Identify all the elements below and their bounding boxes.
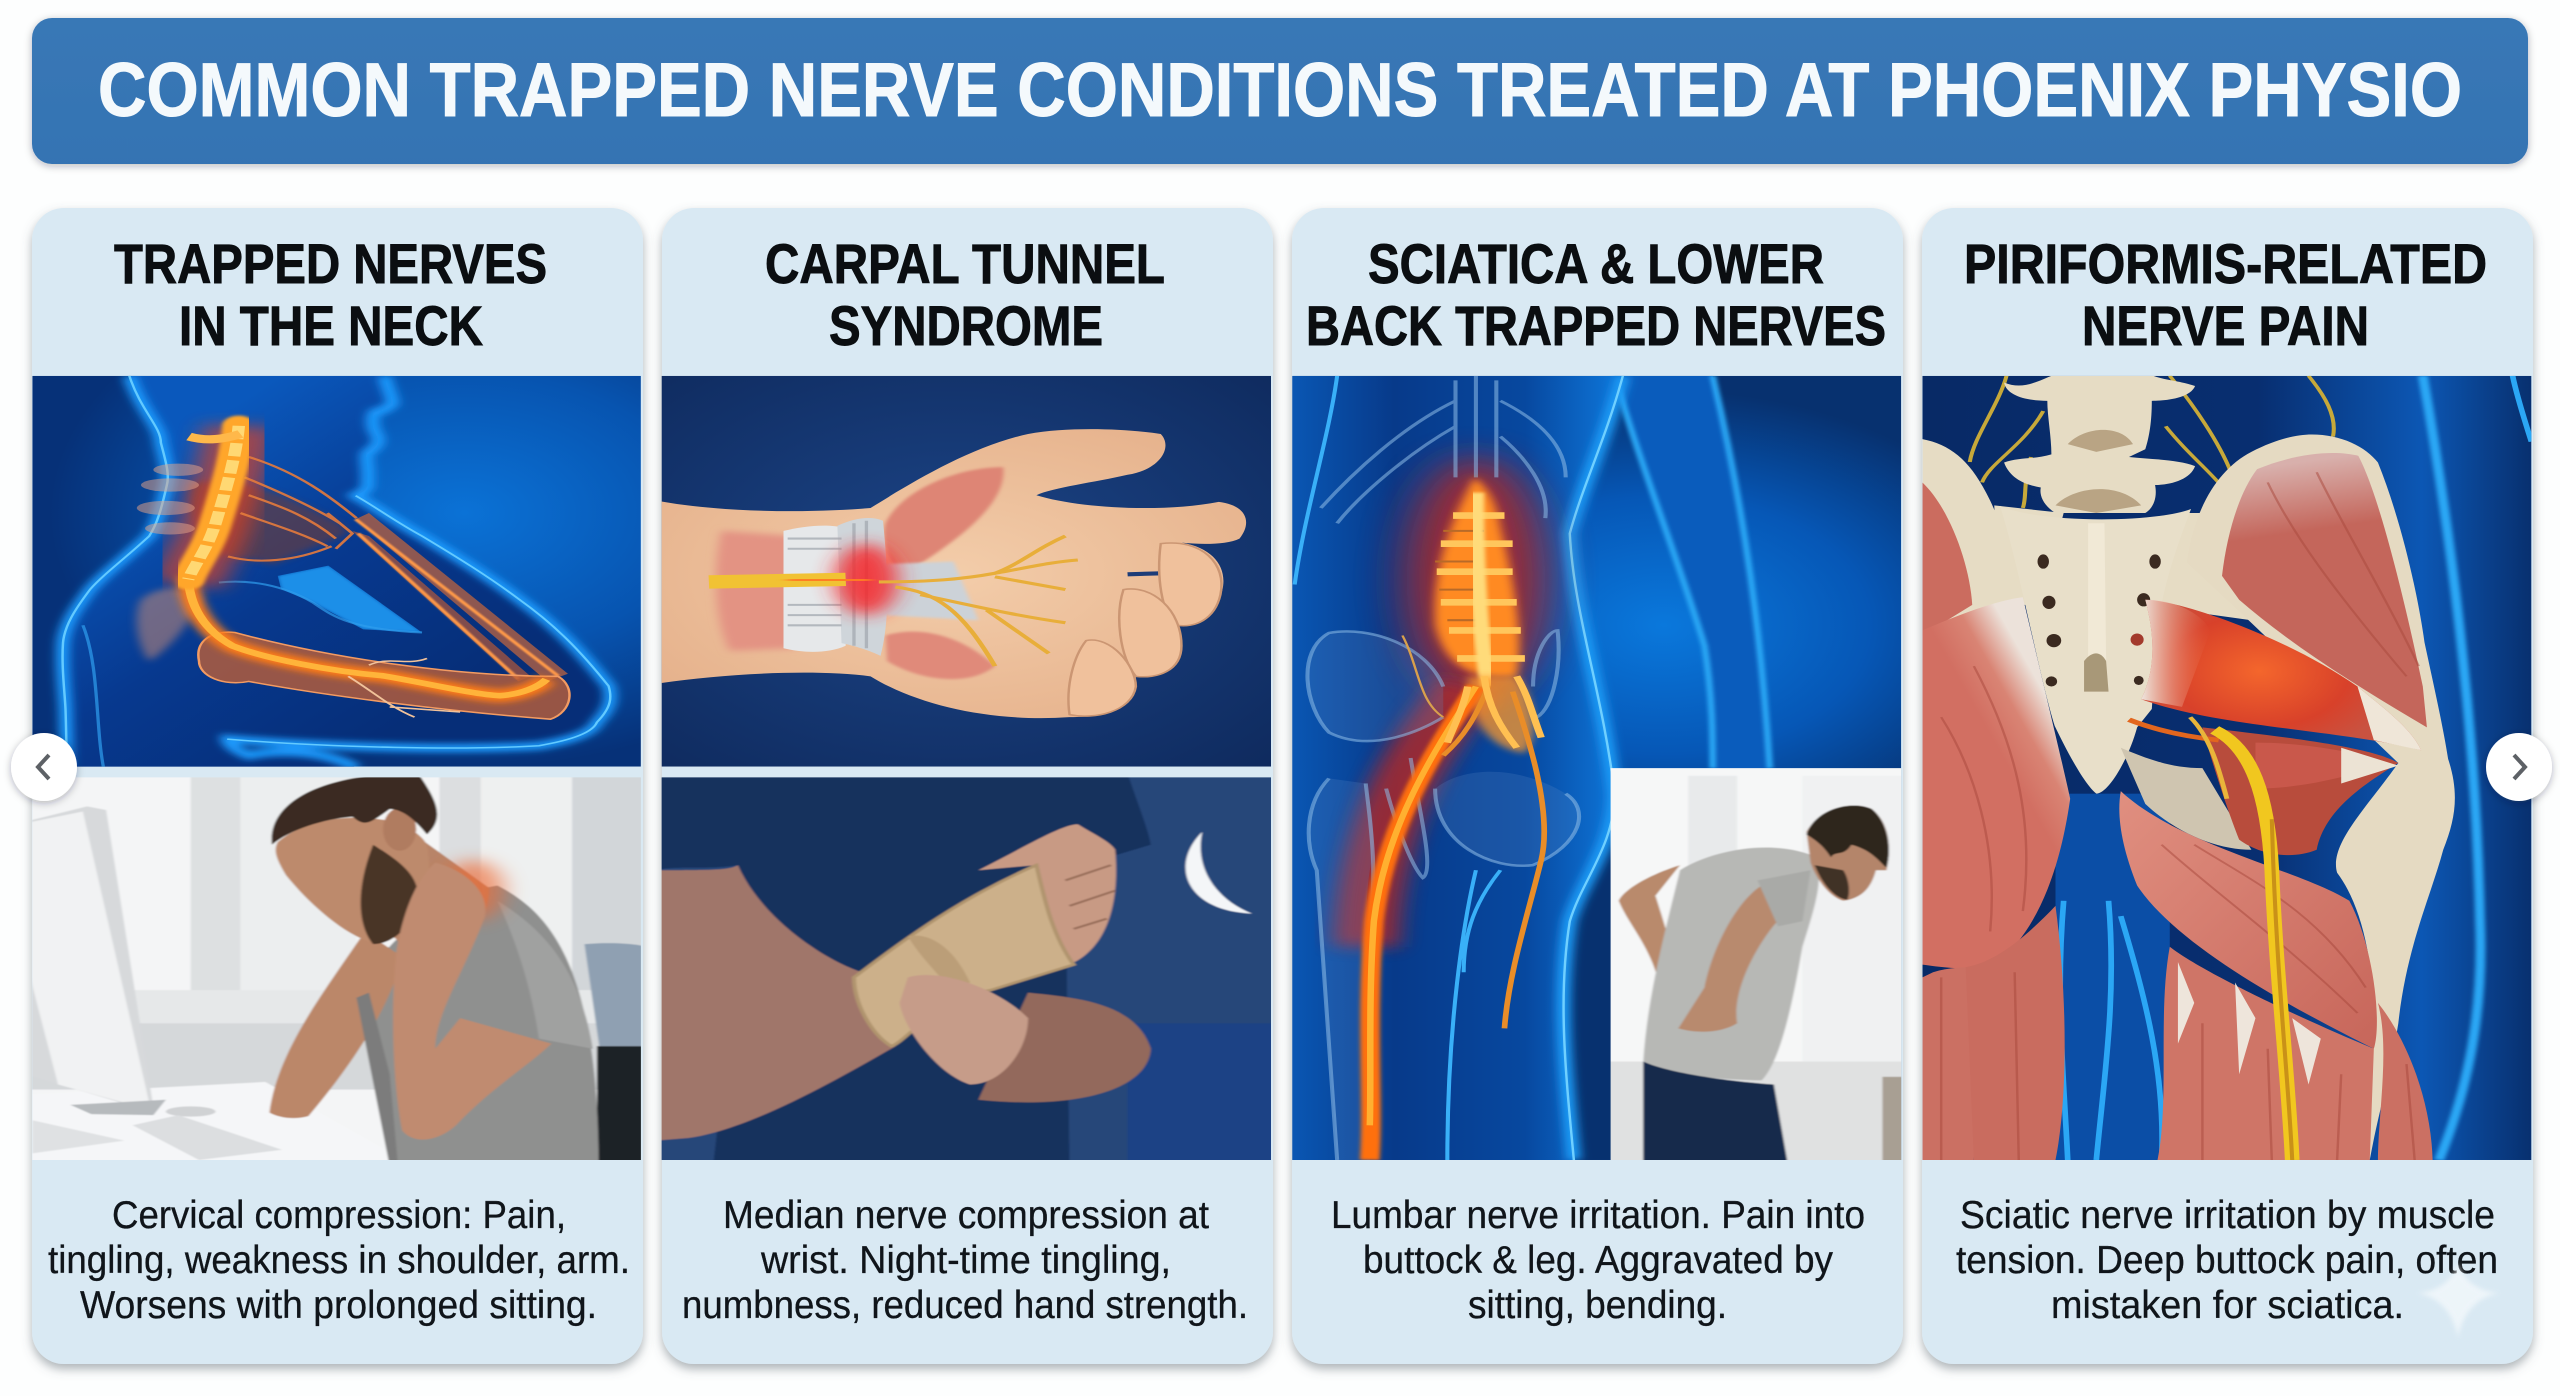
heading: neck: TRAPPED NERVES xyxy=(114,232,547,295)
description: neck: Cervical compression: Pain, xyxy=(112,1194,566,1237)
heading: carpal tunnel xyxy=(765,232,1165,357)
illustration: lumbar spine and sciatic nerve xyxy=(1292,376,1901,1160)
heading: neck xyxy=(114,232,547,357)
arrow: previous carousel button xyxy=(11,733,77,801)
heading: sciatica: BACK TRAPPED NERVES xyxy=(1306,294,1886,357)
panel: trapped nerves in the neck xyxy=(25,208,647,1364)
illustration: pelvis, piriformis muscle and sciatic nerve xyxy=(1922,376,2531,1160)
heading: carpal tunnel: CARPAL TUNNEL xyxy=(765,232,1165,295)
panel: piriformis-related nerve pain xyxy=(1922,208,2533,1364)
photo: man bending and holding lower back xyxy=(1607,766,1909,1164)
heading: piriformis xyxy=(1964,232,2487,357)
illustration: wrist anatomy and median nerve xyxy=(655,376,1271,767)
heading: piriformis: NERVE PAIN xyxy=(2082,294,2369,357)
arrow: next carousel button xyxy=(2486,733,2552,801)
panel: sciatica and lower back trapped nerves xyxy=(1292,208,1909,1364)
description: neck: tingling, weakness in shoulder, arm. xyxy=(48,1239,630,1282)
description: sciatica: sitting, bending. xyxy=(1468,1284,1727,1327)
description: sciatica xyxy=(1331,1194,1865,1327)
heading: neck: IN THE NECK xyxy=(179,294,483,357)
heading: piriformis: PIRIFORMIS-RELATED xyxy=(1964,232,2487,295)
title banner xyxy=(32,18,2528,164)
heading: sciatica: SCIATICA & LOWER xyxy=(1368,232,1824,295)
description: carpal tunnel: numbness, reduced hand strength. xyxy=(682,1284,1248,1327)
icon: sparkle watermark xyxy=(2417,1262,2500,1338)
panel: carpal tunnel syndrome xyxy=(655,208,1277,1364)
illustration: glowing neck and arm nerve xyxy=(32,376,641,768)
description: carpal tunnel: Median nerve compression at xyxy=(723,1194,1209,1237)
description: carpal tunnel xyxy=(682,1194,1248,1327)
photo: person wearing wrist brace at night xyxy=(655,773,1277,1166)
description: piriformis: tension. Deep buttock pain, often xyxy=(1956,1239,2498,1282)
description: neck xyxy=(48,1194,630,1327)
description: carpal tunnel: wrist. Night-time tingling, xyxy=(760,1239,1171,1282)
description: piriformis: mistaken for sciatica. xyxy=(2051,1284,2404,1327)
description: sciatica: Lumbar nerve irritation. Pain into xyxy=(1331,1194,1865,1237)
heading: sciatica xyxy=(1306,232,1886,357)
description: neck: Worsens with prolonged sitting. xyxy=(80,1284,597,1327)
description: piriformis: Sciatic nerve irritation by muscle xyxy=(1960,1194,2495,1237)
description: sciatica: buttock & leg. Aggravated by xyxy=(1363,1239,1833,1282)
description: piriformis xyxy=(1956,1194,2498,1327)
heading: carpal tunnel: SYNDROME xyxy=(829,294,1103,357)
photo: man with neck pain at desk xyxy=(25,773,647,1166)
